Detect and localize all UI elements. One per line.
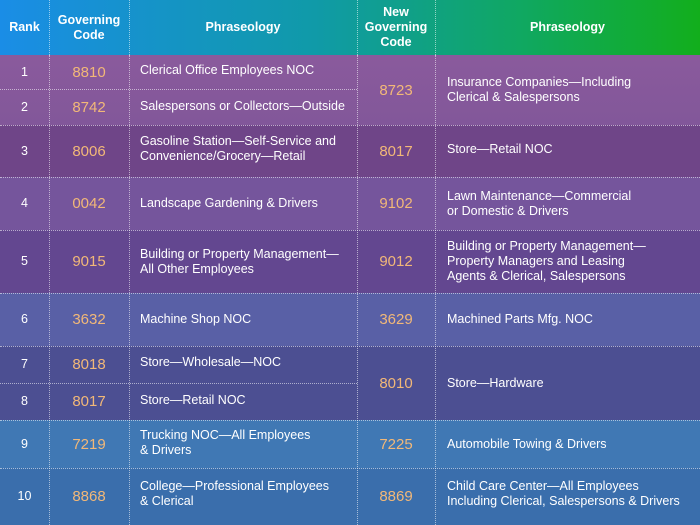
row 10: College—Professional Employees <box>140 479 329 493</box>
header: new governing code: Governing <box>365 20 427 34</box>
row 7: 8018 <box>72 356 106 373</box>
row 3: 3 <box>21 144 28 158</box>
row 6: Machined Parts Mfg. NOC <box>447 312 593 326</box>
row 4: 4 <box>21 196 28 210</box>
header bar <box>0 0 700 55</box>
row 5: Building or Property Management— <box>447 239 646 253</box>
row 9: 9 <box>21 436 28 450</box>
row 9: 7225 <box>379 436 413 452</box>
row 5 <box>21 239 646 283</box>
row 2: Salespersons or Collectors—Outside <box>140 98 345 112</box>
row 9: & Drivers <box>140 443 191 457</box>
row 9: Automobile Towing & Drivers <box>447 436 607 450</box>
row 1: Clerical Office Employees NOC <box>140 62 314 76</box>
rows 1-2 new code: 8723 <box>379 82 413 98</box>
rows 7-8 new code: 8010 <box>379 374 413 392</box>
row 4: 9102 <box>379 195 413 212</box>
row 6: 3629 <box>379 311 413 328</box>
row 3: Gasoline Station—Self-Service and <box>140 134 336 148</box>
row 9: Trucking NOC—All Employees <box>140 428 310 442</box>
row 10: & Clerical <box>140 494 194 508</box>
row 8: Store—Retail NOC <box>140 393 246 407</box>
row 1: 1 <box>21 64 28 78</box>
rows 1-2 new code: Clerical & Salespersons <box>447 90 580 104</box>
row 5: Property Managers and Leasing <box>447 254 625 268</box>
row 8 <box>21 393 246 410</box>
header: new governing code <box>365 5 427 49</box>
row 4: or Domestic & Drivers <box>447 204 569 218</box>
row 6: Machine Shop NOC <box>140 312 251 326</box>
row 7: 7 <box>21 357 28 371</box>
row 5: 5 <box>21 254 28 268</box>
header: governing code <box>58 12 120 42</box>
row 10: Child Care Center—All Employees <box>447 479 639 493</box>
header: new governing code: Code <box>380 35 412 49</box>
row 5: Agents & Clerical, Salespersons <box>447 269 626 283</box>
row 10: Including Clerical, Salespersons & Drivers <box>447 494 680 508</box>
row 2: 2 <box>21 100 28 114</box>
header: phraseology new: Phraseology <box>530 20 605 34</box>
row 6: 6 <box>21 312 28 326</box>
rows 7-8 new code: Store—Hardware <box>447 376 544 390</box>
row 7: Store—Wholesale—NOC <box>140 355 281 369</box>
row 6 <box>21 311 593 328</box>
header: governing code: Governing <box>58 12 120 26</box>
row 4 <box>21 188 631 218</box>
rows 1-2 new code: Insurance Companies—Including <box>447 75 631 89</box>
row 5: 9012 <box>379 253 413 270</box>
row 1 <box>21 62 314 80</box>
row 4: 0042 <box>72 195 106 212</box>
row 9 <box>21 428 607 457</box>
row 10 <box>18 479 680 508</box>
row 10: 10 <box>18 489 31 503</box>
header: rank: Rank <box>9 20 40 34</box>
row 3 <box>21 134 553 163</box>
row 5: Building or Property Management— <box>140 246 339 260</box>
row 7 <box>21 355 281 373</box>
row 9: 7219 <box>72 436 106 452</box>
row 6: 3632 <box>72 311 106 328</box>
row 3: 8017 <box>379 142 413 160</box>
row 2 <box>21 98 345 116</box>
row 10: 8869 <box>379 488 413 505</box>
row 3: Convenience/Grocery—Retail <box>140 149 305 163</box>
row 8: 8 <box>21 394 28 408</box>
header: governing code: Code <box>73 28 105 42</box>
rows 7-8 new code <box>379 374 544 392</box>
row 1: 8810 <box>72 64 106 80</box>
rows 1-2 new code <box>379 75 631 104</box>
header: phraseology: Phraseology <box>205 20 281 34</box>
row 3: 8006 <box>72 142 106 160</box>
row 5: 9015 <box>72 253 106 270</box>
row 2: 8742 <box>72 98 106 116</box>
row 10: 8868 <box>72 488 106 505</box>
row 4: Landscape Gardening & Drivers <box>140 196 318 210</box>
row 3: Store—Retail NOC <box>447 142 553 156</box>
row 8: 8017 <box>72 393 106 410</box>
row 5: All Other Employees <box>140 262 254 276</box>
row 4: Lawn Maintenance—Commercial <box>447 188 631 202</box>
header: new governing code: New <box>383 5 409 19</box>
